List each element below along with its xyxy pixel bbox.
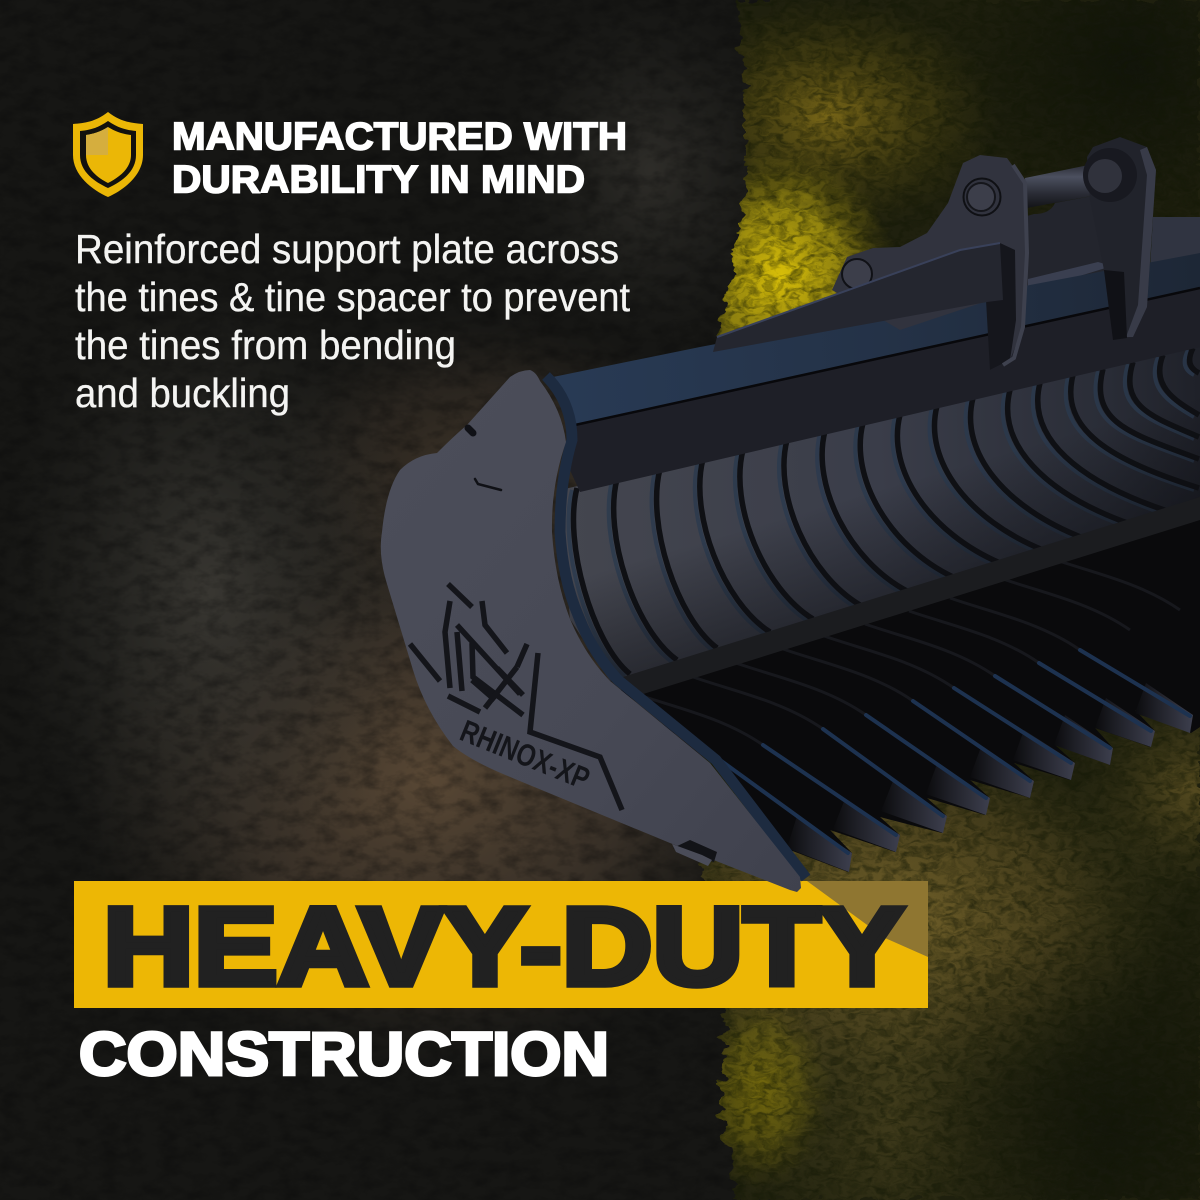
headline band: yellow banner bbox=[74, 881, 928, 1008]
black underside and tines bbox=[620, 512, 1200, 872]
rear lifting ear bbox=[1083, 137, 1156, 340]
body text bbox=[75, 226, 631, 416]
heading: manufactured with durability in mind: DURABILITY IN MIND bbox=[172, 158, 585, 202]
front lifting ear edge bbox=[1003, 165, 1027, 365]
side plate small slots bbox=[468, 428, 501, 490]
wedge highlight bbox=[717, 243, 1000, 337]
headline: heavy-duty: HEAVY-DUTY bbox=[103, 886, 904, 1008]
icon: shield bbox=[73, 112, 143, 197]
support wedge plate bbox=[713, 243, 1003, 352]
side plate bbox=[381, 370, 801, 892]
rear mounting plate and pin bbox=[1025, 160, 1200, 318]
logo wordmark: RHINOX-XP bbox=[455, 713, 595, 796]
mounting tab bbox=[672, 840, 717, 866]
front lifting ear bbox=[832, 155, 1027, 370]
heading: manufactured with durability in mind bbox=[172, 116, 627, 202]
heading: manufactured with durability in mind: MANUFACTURED WITH bbox=[172, 116, 627, 158]
body text: the tines & tine spacer to prevent bbox=[75, 274, 631, 320]
side plate blue rim bbox=[546, 376, 806, 878]
body text: and buckling bbox=[75, 370, 290, 416]
background: yellow painted texture right side bbox=[698, 0, 1200, 1200]
body text: the tines from bending bbox=[75, 322, 456, 368]
product: rake bucket attachment bbox=[381, 137, 1200, 892]
top beam bbox=[548, 253, 1200, 492]
cross bar bbox=[610, 497, 1200, 695]
body text: Reinforced support plate across bbox=[75, 226, 619, 272]
rib comb bbox=[560, 340, 1200, 685]
rhino logo cut-outs bbox=[410, 584, 622, 810]
subheadline: construction: CONSTRUCTION bbox=[79, 1020, 609, 1088]
